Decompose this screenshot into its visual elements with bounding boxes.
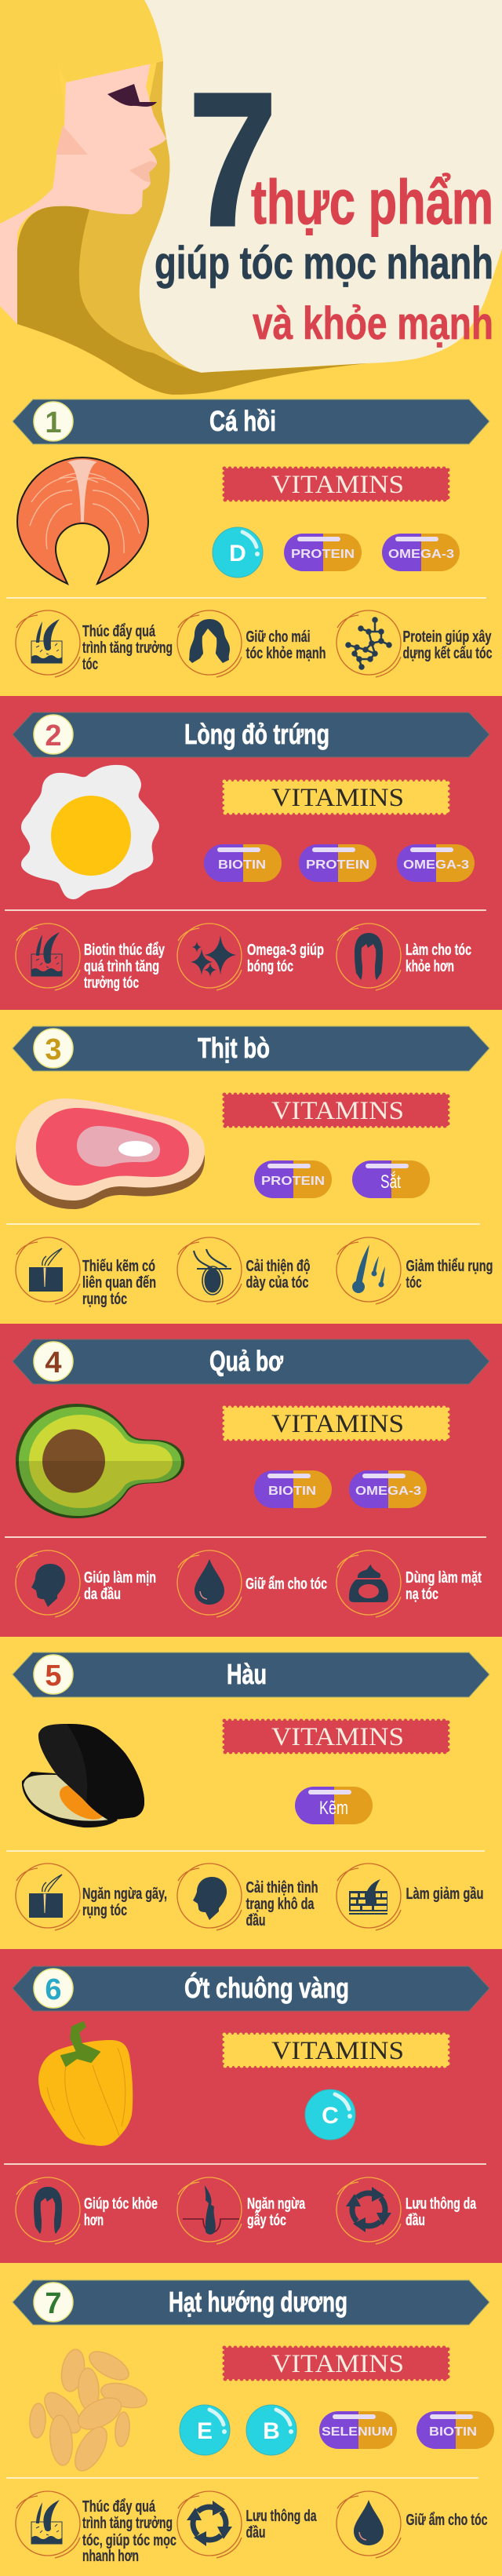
benefit 2 [177,924,324,990]
section body [6,1095,493,1308]
section banner [13,712,489,757]
benefit 1: tóc, giúp tóc mọc [82,2532,176,2549]
front hair and fringe [0,0,163,224]
vitamin E bubble: E [197,2418,213,2444]
benefit 2 [177,2177,306,2244]
section title: Hạt hướng dương [169,2286,347,2318]
section banner [13,1339,489,1384]
capsule: protein: PROTEIN [261,1175,325,1188]
benefit 1 [16,1864,167,1930]
number badge [34,715,73,754]
number badge: 7 [45,2287,62,2320]
number badge [34,402,73,441]
illustration: fried egg [21,765,159,899]
section title: Quả bơ [209,1345,283,1377]
benefit 1: liên quan đến [82,1274,156,1292]
header illustration: woman with long blonde hair [0,0,502,395]
number badge [34,1655,73,1694]
benefit 1 [16,2491,176,2565]
benefit 3: đầu [406,2212,425,2229]
icon: cream jar [349,1565,388,1602]
vitamins badge: VITAMINS [271,2350,404,2378]
section title: Hàu [227,1658,267,1690]
section body [6,468,493,677]
section body [5,1408,486,1617]
benefit 1 [16,924,166,992]
panel: 2 Lòng đỏ trứng [5,712,489,992]
benefit 2: dày của tóc [246,1274,309,1292]
benefit 2: đầu [246,1912,265,1929]
capsule: biotin: BIOTIN [268,1485,316,1498]
red background band: section 2 [0,696,502,1010]
capsule: Kẽm [295,1787,373,1824]
benefit 2: bóng tóc [247,958,293,975]
benefit 1: trưởng tóc [84,975,139,992]
capsule: biotin: BIOTIN [218,858,266,872]
benefit 3: khỏe hơn [406,958,454,975]
vitamin B bubble [246,2405,296,2455]
cheek blush [56,126,88,155]
number badge [34,1029,73,1068]
number badge: 5 [45,1660,62,1692]
vitamins badge [224,782,448,813]
panel: 5 Hàu [6,1652,489,1930]
benefit 1: Giúp làm mịn [84,1569,156,1587]
vitamin E bubble [180,2405,230,2455]
vitamins badge [224,1095,448,1126]
illustration: sunflower seeds [29,2346,150,2476]
vitamins badge [224,1721,448,1752]
illustration: avocado [16,1404,184,1518]
vitamins badge: VITAMINS [271,1097,404,1125]
benefit 2 [177,1237,311,1304]
benefit 2: Lưu thông da [246,2508,317,2525]
section title: Lòng đỏ trứng [184,718,329,750]
benefit 3 [336,1864,483,1930]
section banner [13,1652,489,1697]
benefit 2: đầu [246,2524,265,2541]
benefit 2 [177,1550,327,1617]
panel: 1 Cá hồi [6,399,493,677]
capsule: protein [284,534,362,571]
numeral 7: 7 [188,53,278,266]
benefit 2: Giữ ẩm cho tóc [246,1576,327,1593]
section body [6,1721,485,1930]
benefit 1: trình tăng trưởng [82,2515,173,2532]
number badge: 3 [45,1033,62,1066]
long hair, light gold [71,61,198,373]
divider [6,1850,485,1852]
illustration: oyster [22,1724,144,1827]
cream backdrop [140,0,502,373]
number badge [34,1969,73,2008]
benefit 1: Thiếu kẽm có [82,1258,155,1275]
divider [4,2163,486,2165]
section banner [13,1966,489,2011]
vitamins badge: VITAMINS [271,1410,404,1438]
divider [6,1223,480,1225]
number badge [34,2283,73,2322]
benefit 1: da đầu [84,1586,121,1603]
vitamins badge [224,2035,448,2066]
benefit 1: trình tăng trưởng [82,639,173,657]
capsule: omega-3: OMEGA-3 [355,1485,421,1498]
benefit 2 [177,2491,317,2558]
vitamins badge: VITAMINS [271,471,404,499]
section title: Cá hồi [209,405,276,437]
benefit 3 [336,2491,488,2558]
capsule: biotin [254,1470,332,1508]
divider [6,2477,478,2479]
number badge [34,1342,73,1381]
benefit 1: Thúc đẩy quá [82,2498,156,2516]
vitamin B bubble: B [263,2418,280,2444]
vitamin C bubble [305,2090,355,2140]
benefit 1: rụng tóc [82,1291,127,1308]
section body [6,2348,494,2565]
benefit 1 [16,610,173,677]
capsule: Sắt: Sắt [380,1171,401,1193]
section banner [13,1026,489,1071]
panel: 7 Hạt hướng dương [6,2280,494,2565]
long hair, dark gold ribbon [17,206,368,395]
section title: Ớt chuông vàng [184,1971,349,2004]
capsule: protein [299,844,376,882]
divider [6,597,486,599]
benefit 2 [177,610,326,677]
benefit 2: Giữ cho mái [246,629,311,646]
capsule: protein: PROTEIN [306,858,369,872]
benefit 1: Ngăn ngừa gãy, [82,1886,167,1903]
benefit 3 [336,610,493,677]
capsule: biotin: BIOTIN [429,2425,477,2439]
vitamin C bubble: C [322,2103,339,2129]
benefit 3 [336,1237,493,1304]
section banner [13,399,489,444]
face and neck [0,63,166,324]
benefit 1: hơn [84,2212,104,2229]
section banner [13,2280,489,2325]
benefit 1: Thúc đẩy quá [82,623,156,640]
benefit 2: Omega-3 giúp [247,942,324,959]
benefit 1: tóc [82,656,98,673]
vitamins badge [224,468,448,500]
section title: Thịt bò [198,1032,270,1064]
benefit 3 [336,2177,477,2244]
red background band: section 4 [0,1324,502,1637]
illustration: steak [16,1099,205,1209]
number badge: 6 [45,1973,62,2006]
vitamins badge: VITAMINS [271,2037,404,2065]
capsule: protein [254,1160,332,1198]
capsule: selenium [319,2411,397,2449]
divider [5,909,486,911]
benefit 2: tóc khỏe mạnh [246,645,326,662]
benefit 1: Giúp tóc khỏe [84,2195,158,2213]
capsule: protein: PROTEIN [291,548,355,561]
capsule: Sắt [352,1160,430,1198]
capsule: biotin [417,2411,494,2449]
capsule: omega-3: OMEGA-3 [403,858,469,872]
capsule: biotin [204,844,282,882]
vitamins badge [224,1408,448,1439]
panel: 6 Ớt chuông vàng [4,1966,489,2244]
number badge: 1 [45,406,62,439]
number badge: 4 [45,1346,62,1379]
illustration: salmon steak [17,457,148,584]
illustration: yellow bell pepper [38,2022,133,2146]
lips [129,161,157,183]
benefit 3: nạ tóc [406,1586,438,1603]
benefit 1 [16,1237,156,1308]
benefit 2: gẫy tóc [247,2210,286,2229]
benefit 1: nhanh hơn [82,2548,139,2565]
panel: 3 Thịt bò [6,1026,493,1308]
benefit 3 [336,924,471,990]
capsule: omega-3 [349,1470,427,1508]
capsule: omega-3: OMEGA-3 [388,548,454,561]
benefit 1: rụng tóc [82,1902,127,1919]
number badge: 2 [45,720,62,752]
benefit 1 [16,2177,158,2244]
benefit 3: tóc [406,1274,422,1292]
benefit 2: Cải thiện độ [246,1258,311,1275]
benefit 2: Ngăn ngừa [247,2195,306,2213]
vitamins badge: VITAMINS [271,784,404,812]
section body [4,2035,486,2244]
capsule: omega-3 [382,534,460,571]
title [155,53,493,349]
capsule: Kẽm: Kẽm [319,1798,348,1819]
vitamin D bubble: D [229,541,246,567]
benefit 3: Làm cho tóc [406,942,471,959]
section body [5,782,486,992]
benefit 1: quá trình tăng [84,958,159,975]
benefit 2: Cải thiện tình [246,1879,318,1896]
divider [5,1536,486,1538]
benefit 3 [336,1550,482,1617]
benefit 2: trạng khô da [246,1896,315,1913]
vitamins badge [224,2348,448,2379]
capsule: omega-3 [397,844,475,882]
red background band: section 6 [0,1949,502,2263]
benefit 1 [16,1550,156,1617]
vitamins badge: VITAMINS [271,1723,404,1751]
eye and lashes [107,84,157,107]
capsule: selenium: SELENIUM [322,2425,393,2439]
benefit 2 [177,1864,318,1930]
benefit 1: Biotin thúc đẩy [84,942,166,959]
vitamin D bubble [213,527,263,578]
panel: 4 Quả bơ [5,1339,489,1617]
